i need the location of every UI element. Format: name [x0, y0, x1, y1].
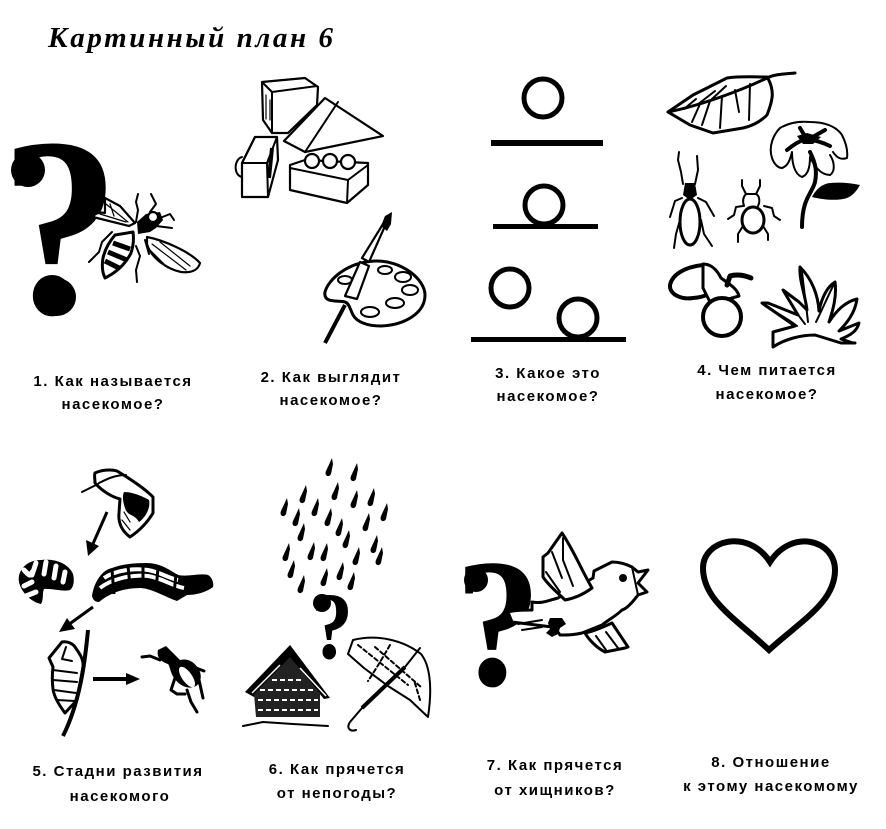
title: Картинный план 6: [47, 22, 336, 54]
icon: umbrella: [348, 638, 430, 731]
arrow: caterpillar to pupa: [59, 607, 93, 632]
icon: question mark with wasp: [0, 85, 200, 368]
caption 7: от хищников?: [494, 782, 616, 799]
caption 4: насекомое?: [716, 386, 818, 403]
caption 1: насекомое?: [62, 396, 164, 413]
caption 6: от непогоды?: [277, 785, 397, 802]
icon: pupa: [49, 630, 88, 736]
icon: acorns: [670, 264, 751, 336]
icon: wasp: [89, 194, 200, 282]
caption 5: 5. Стадни развития: [32, 763, 204, 780]
icon: development stages of insect: [19, 470, 213, 736]
caption 1: 1. Как называется: [33, 373, 193, 390]
icon: small question mark: ?: [311, 574, 353, 679]
icon: two balls above and on line: [471, 269, 626, 342]
icon: bird: [508, 533, 648, 652]
icon: question mark with bird: ?: [455, 521, 541, 725]
icon: question mark with wasp: ?: [0, 85, 120, 368]
arrow: pupa to beetle: [93, 673, 140, 685]
icon: question mark with bird: [455, 521, 648, 725]
icon: long beetle: [670, 152, 714, 248]
caption 7: 7. Как прячется: [487, 757, 623, 774]
caption 4: 4. Чем питается: [697, 362, 837, 379]
caption 8: к этому насекомому: [683, 778, 859, 795]
icon: leaf: [668, 73, 795, 133]
icon: ball on line: [493, 186, 598, 229]
icon: flower: [771, 122, 860, 227]
icon: round beetle: [728, 180, 780, 242]
icon: egg on leaf: [82, 470, 153, 537]
caption 3: 3. Какое это: [495, 365, 601, 382]
icon: ball above line: [491, 79, 603, 146]
icon: palette and brush: [325, 212, 425, 343]
arrow: leaf to larva: [86, 512, 107, 556]
icon: adult beetle: [142, 646, 204, 712]
icon: grass plant: [762, 267, 859, 347]
icon: caterpillar: [92, 563, 213, 602]
caption 2: насекомое?: [280, 392, 382, 409]
caption 3: насекомое?: [497, 388, 599, 405]
caption 8: 8. Отношение: [711, 754, 831, 771]
icon: log house: [243, 645, 330, 726]
icon: heart: [703, 541, 835, 650]
caption 2: 2. Как выглядит: [261, 369, 401, 386]
icon: building blocks: [236, 78, 383, 203]
icon: larva: [19, 560, 74, 604]
caption 5: насекомого: [70, 788, 170, 805]
caption 6: 6. Как прячется: [269, 761, 405, 778]
icon: rain: [281, 458, 388, 593]
